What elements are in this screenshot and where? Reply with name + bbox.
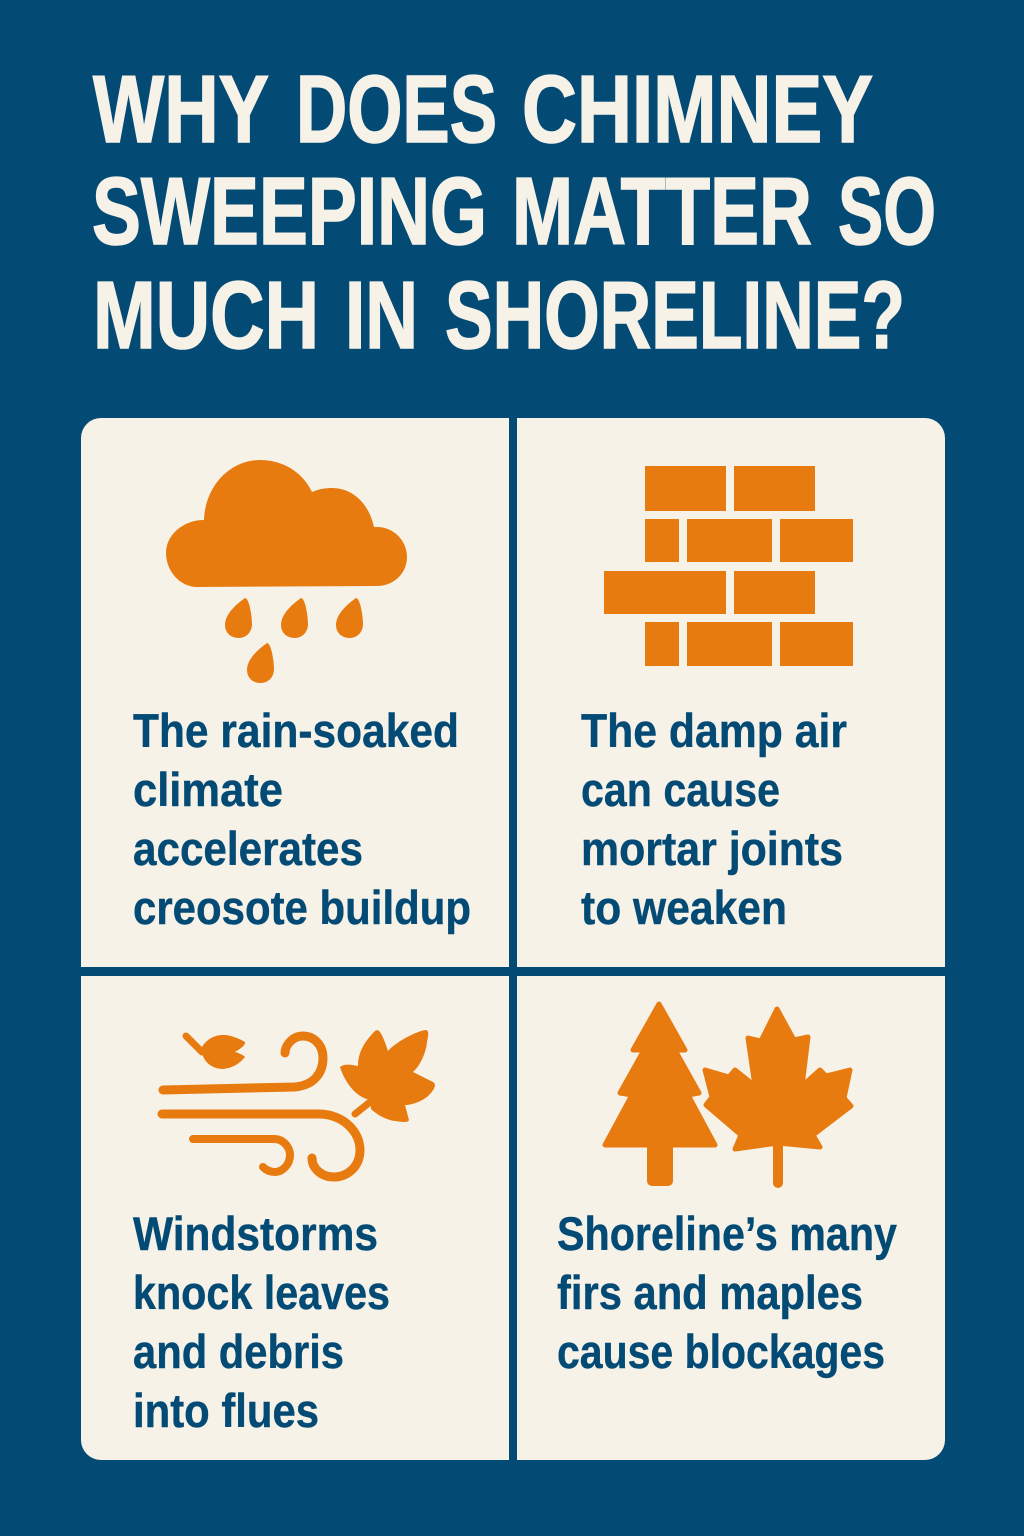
panel: damp air xyxy=(517,418,945,967)
icon: brick wall xyxy=(604,466,853,666)
panel: rain-soaked climate xyxy=(81,418,509,967)
text: damp air: can cause xyxy=(581,763,780,816)
title: MUCH xyxy=(93,262,319,369)
text: firs and maples: Shoreline’s many xyxy=(557,1207,897,1260)
title: DOES xyxy=(296,56,497,163)
text: damp air: mortar joints xyxy=(581,822,843,875)
panel: firs and maples xyxy=(517,976,945,1460)
title: WHY xyxy=(93,56,269,163)
text: rain-soaked climate: The rain-soaked xyxy=(133,704,459,757)
text: rain-soaked climate: accelerates xyxy=(133,822,363,875)
text: rain-soaked climate xyxy=(133,704,471,934)
icon: fir tree xyxy=(605,1004,715,1186)
icon: wind and leaves xyxy=(162,1030,435,1177)
text: windstorms: knock leaves xyxy=(133,1266,390,1319)
title: CHIMNEY xyxy=(522,56,873,163)
text: firs and maples: firs and maples xyxy=(557,1266,863,1319)
text: damp air xyxy=(581,704,847,934)
icon: maple leaf xyxy=(705,1009,851,1183)
text: windstorms: into flues xyxy=(133,1384,319,1437)
text: damp air: The damp air xyxy=(581,704,847,757)
title: MATTER xyxy=(512,158,812,265)
panel: windstorms xyxy=(81,976,509,1460)
text: firs and maples: cause blockages xyxy=(557,1325,885,1378)
icon: rain cloud xyxy=(166,460,407,683)
text: windstorms: Windstorms xyxy=(133,1207,378,1260)
title xyxy=(92,56,936,369)
text: rain-soaked climate: climate xyxy=(133,763,283,816)
text: damp air: to weaken xyxy=(581,881,787,934)
text: windstorms: and debris xyxy=(133,1325,344,1378)
text: windstorms xyxy=(133,1207,390,1437)
text: firs and maples xyxy=(557,1207,897,1378)
title: SWEEPING xyxy=(92,158,487,265)
title: SO xyxy=(838,158,936,265)
title: IN xyxy=(345,262,418,369)
text: rain-soaked climate: creosote buildup xyxy=(133,881,471,934)
